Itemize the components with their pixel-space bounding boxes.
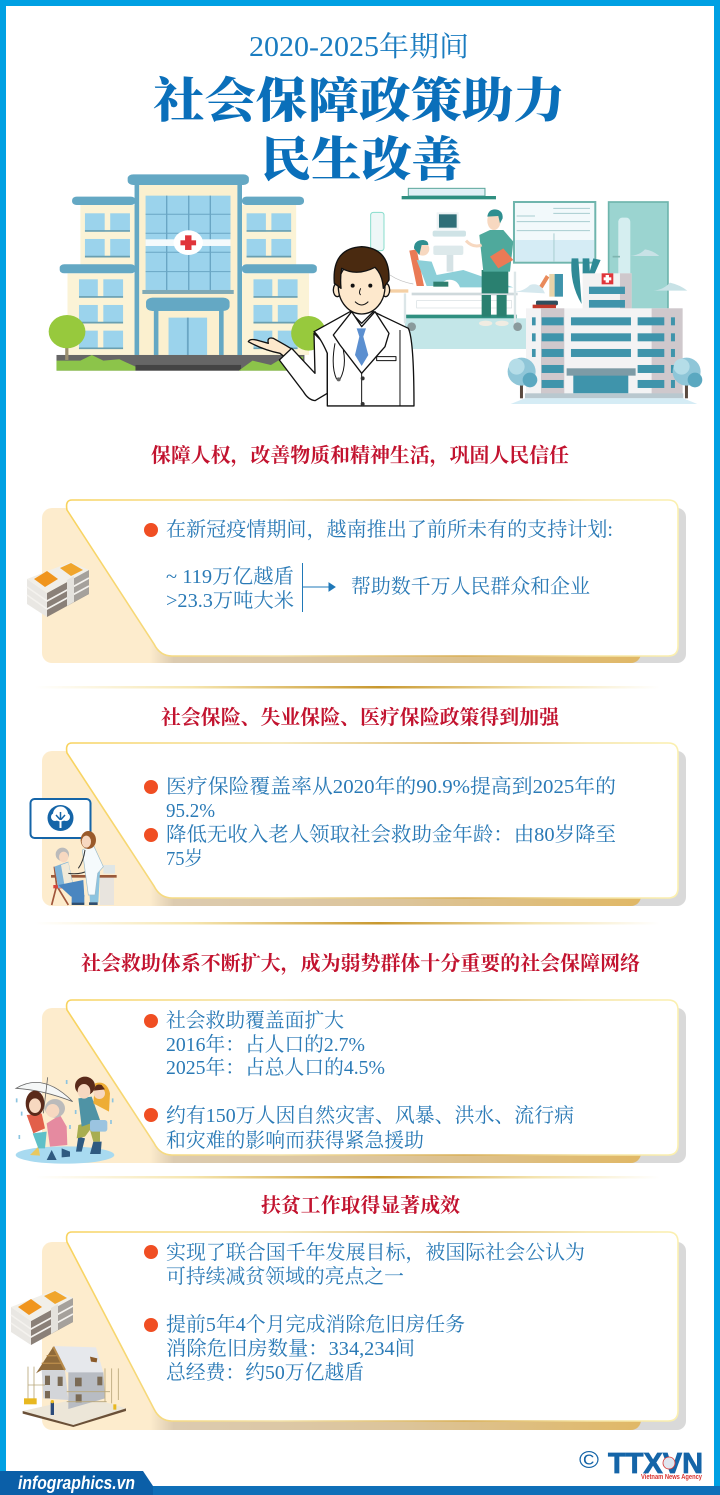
illustration: left hospital building bbox=[49, 174, 326, 371]
bullet bbox=[144, 780, 158, 794]
icon: money stack bbox=[11, 1290, 73, 1345]
panel: social assistance bbox=[16, 1000, 686, 1164]
text: beneficiaries: 帮助数千万人民群众和企业 bbox=[351, 575, 590, 598]
panel: insurance bbox=[30, 743, 686, 906]
card body bbox=[67, 500, 678, 656]
arrow bbox=[302, 563, 335, 612]
text: coverage: 医疗保险覆盖率从2020年的90.9%提高到2025年的 bbox=[166, 775, 616, 798]
text: coverage: 95.2% bbox=[166, 800, 215, 822]
text: coverage bbox=[166, 775, 616, 822]
footer site name: infographics.vn bbox=[18, 1473, 135, 1493]
text: housing: 提前5年4个月完成消除危旧房任务 bbox=[166, 1313, 465, 1336]
text: emergency aid: 和灾难的影响而获得紧急援助 bbox=[166, 1129, 424, 1152]
heading: section 1: 保障人权，改善物质和精神生活，巩固人民信任 bbox=[151, 444, 569, 467]
text: housing: 总经费：约50万亿越盾 bbox=[166, 1361, 364, 1384]
text: emergency aid bbox=[166, 1104, 574, 1152]
subtitle: period: 2020-2025年期间 bbox=[249, 31, 469, 63]
card body bbox=[67, 743, 678, 898]
text: UN goals: 可持续减贫领域的亮点之一 bbox=[166, 1265, 404, 1288]
text: housing: 消除危旧房数量：334,234间 bbox=[166, 1337, 415, 1360]
bullet bbox=[144, 1245, 158, 1259]
text: emergency aid: 约有150万人因自然灾害、风暴、洪水、流行病 bbox=[166, 1104, 574, 1127]
text: amounts bbox=[166, 565, 294, 612]
heading: section 4: 扶贫工作取得显著成效 bbox=[261, 1194, 460, 1217]
text: UN goals: 实现了联合国千年发展目标，被国际社会公认为 bbox=[166, 1241, 585, 1264]
panel: poverty reduction bbox=[11, 1232, 686, 1430]
bullet bbox=[144, 828, 158, 842]
illustration: house under construction bbox=[23, 1346, 126, 1427]
title: 民生改善 bbox=[261, 134, 462, 187]
text: pension age bbox=[166, 823, 616, 870]
panel: support plans bbox=[27, 500, 686, 663]
icon: insurance logo bbox=[30, 799, 90, 838]
illustration: hospital ward room bbox=[371, 188, 668, 349]
text: coverage expansion: 2016年：占人口的2.7% bbox=[166, 1033, 365, 1056]
card body bbox=[67, 1000, 678, 1155]
text: amounts: ~ 119万亿越盾 bbox=[166, 565, 294, 588]
footer band bbox=[0, 1471, 720, 1495]
illustration: doctor bbox=[248, 247, 414, 406]
illustration: right small hospital bbox=[508, 249, 702, 404]
text: intro: 在新冠疫情期间，越南推出了前所未有的支持计划: bbox=[166, 518, 613, 541]
logo: TTXVN: TTXVN bbox=[608, 1448, 703, 1480]
illustration: family in flood bbox=[16, 1077, 114, 1164]
text: UN goals bbox=[166, 1241, 585, 1288]
text: coverage expansion: 2025年：占总人口的4.5% bbox=[166, 1056, 385, 1079]
text: housing bbox=[166, 1313, 465, 1384]
bullet bbox=[144, 523, 158, 537]
text: amounts: >23.3万吨大米 bbox=[166, 589, 294, 612]
text: pension age: 降低无收入老人领取社会救助金年龄：由80岁降至 bbox=[166, 823, 616, 846]
bullet bbox=[144, 1108, 158, 1122]
logo: TTXVN: © bbox=[579, 1447, 599, 1474]
icon: money stack bbox=[27, 562, 89, 617]
text: pension age: 75岁 bbox=[166, 847, 203, 870]
illustration: doctor checking elderly patient bbox=[51, 831, 117, 905]
title: 社会保障政策助力 bbox=[153, 75, 565, 128]
logo: TTXVN: Vietnam News Agency bbox=[641, 1474, 702, 1481]
heading: section 3: 社会救助体系不断扩大，成为弱势群体十分重要的社会保障网络 bbox=[81, 951, 640, 975]
heading: section 2: 社会保险、失业保险、医疗保险政策得到加强 bbox=[161, 705, 561, 729]
card body bbox=[67, 1232, 678, 1421]
text: coverage expansion: 社会救助覆盖面扩大 bbox=[166, 1009, 344, 1032]
bullet bbox=[144, 1318, 158, 1332]
bullet bbox=[144, 1014, 158, 1028]
text: coverage expansion bbox=[166, 1009, 385, 1079]
title bbox=[153, 75, 565, 187]
